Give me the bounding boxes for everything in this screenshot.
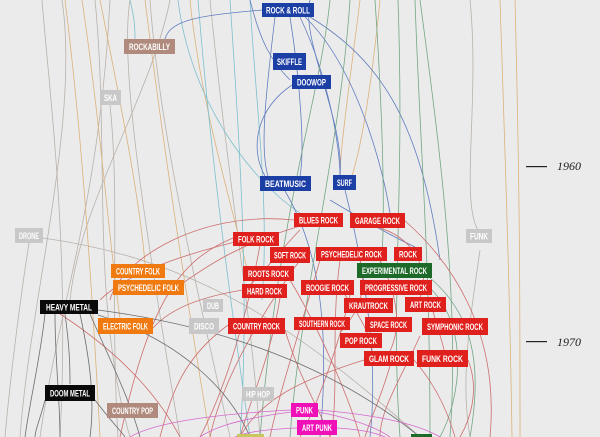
label: SPACE ROCK bbox=[365, 317, 412, 332]
label: SOUTHERN ROCK: SOUTHERN ROCK bbox=[299, 319, 345, 329]
label: SPACE ROCK: SPACE ROCK bbox=[370, 320, 407, 330]
label: HEAVY METAL bbox=[40, 300, 98, 314]
label: COUNTRY FOLK bbox=[111, 264, 165, 278]
timeline marker 1960 bbox=[526, 159, 581, 173]
label: PSYCHEDELIC FOLK: PSYCHEDELIC FOLK bbox=[118, 283, 179, 293]
timeline marker 1970 bbox=[526, 335, 581, 349]
label: COUNTRY ROCK bbox=[228, 318, 285, 334]
label: PROGRESSIVE ROCK bbox=[360, 280, 432, 295]
label: SKIFFLE: SKIFFLE bbox=[277, 57, 302, 67]
label: SURF: SURF bbox=[337, 178, 352, 188]
label: BLUES ROCK: BLUES ROCK bbox=[299, 216, 338, 226]
label: FOLK ROCK: FOLK ROCK bbox=[238, 234, 274, 244]
label: COUNTRY FOLK: COUNTRY FOLK bbox=[116, 266, 160, 276]
partial box bottom yellow bbox=[237, 434, 264, 437]
label: PSYCHEDELIC ROCK: PSYCHEDELIC ROCK bbox=[321, 250, 382, 260]
label: BEATMUSIC bbox=[260, 176, 311, 191]
label: ELECTRIC FOLK bbox=[98, 318, 153, 334]
label: KRAUTROCK bbox=[344, 298, 393, 313]
label: DUB bbox=[203, 299, 223, 312]
label: SYMPHONIC ROCK: SYMPHONIC ROCK bbox=[427, 322, 483, 332]
label: GLAM ROCK: GLAM ROCK bbox=[369, 354, 409, 364]
label: GLAM ROCK bbox=[364, 351, 414, 366]
label: FUNK bbox=[466, 229, 492, 243]
label: FOLK ROCK bbox=[233, 232, 279, 246]
label: ROOTS ROCK bbox=[243, 266, 294, 281]
label: PUNK bbox=[291, 403, 318, 417]
label: HIP HOP bbox=[242, 387, 274, 401]
label: HIP HOP: HIP HOP bbox=[246, 390, 270, 400]
label: BOOGIE ROCK bbox=[301, 280, 354, 295]
label: ART ROCK bbox=[405, 297, 446, 312]
label: FUNK ROCK: FUNK ROCK bbox=[422, 354, 463, 364]
timeline marker 1970: 1970 bbox=[557, 335, 581, 349]
label: SKA bbox=[100, 90, 121, 105]
label: DRONE bbox=[15, 228, 43, 243]
label: COUNTRY POP bbox=[107, 403, 158, 418]
label: PSYCHEDELIC FOLK bbox=[113, 280, 184, 295]
label: EXPERIMENTAL ROCK bbox=[357, 263, 432, 278]
label: DOOM METAL bbox=[45, 385, 95, 401]
label: POP ROCK bbox=[340, 333, 382, 348]
label: ELECTRIC FOLK: ELECTRIC FOLK bbox=[103, 322, 148, 332]
label: DUB: DUB bbox=[207, 301, 219, 311]
label: BEATMUSIC: BEATMUSIC bbox=[265, 179, 306, 189]
label: DOOM METAL: DOOM METAL bbox=[50, 388, 90, 398]
label: SOFT ROCK: SOFT ROCK bbox=[274, 250, 306, 260]
timeline marker 1960: 1960 bbox=[557, 159, 581, 173]
label: PUNK: PUNK bbox=[296, 406, 313, 416]
label: ROCK & ROLL bbox=[262, 3, 314, 17]
label: DRONE: DRONE bbox=[19, 231, 39, 241]
label: HEAVY METAL: HEAVY METAL bbox=[46, 302, 92, 312]
label: DISCO bbox=[189, 318, 219, 334]
label: COUNTRY POP: COUNTRY POP bbox=[112, 406, 153, 416]
label: BLUES ROCK bbox=[294, 213, 343, 227]
label: POP ROCK: POP ROCK bbox=[345, 336, 377, 346]
label: COUNTRY ROCK: COUNTRY ROCK bbox=[233, 322, 280, 332]
label: DISCO: DISCO bbox=[194, 322, 214, 332]
label: GARAGE ROCK: GARAGE ROCK bbox=[355, 216, 400, 226]
label: ROCK: ROCK bbox=[399, 250, 417, 260]
label: EXPERIMENTAL ROCK: EXPERIMENTAL ROCK bbox=[362, 266, 427, 276]
label: BOOGIE ROCK: BOOGIE ROCK bbox=[306, 283, 349, 293]
label: SKIFFLE bbox=[273, 53, 306, 70]
label: SOUTHERN ROCK bbox=[294, 317, 350, 330]
label: ART PUNK: ART PUNK bbox=[302, 423, 332, 433]
label: ROCKABILLY bbox=[124, 39, 175, 54]
label: ROOTS ROCK: ROOTS ROCK bbox=[248, 269, 289, 279]
label: SOFT ROCK bbox=[270, 247, 310, 263]
label: ART PUNK bbox=[297, 420, 337, 435]
label: HARD ROCK bbox=[242, 284, 287, 298]
label: ROCK bbox=[394, 247, 422, 261]
label: HARD ROCK: HARD ROCK bbox=[247, 286, 282, 296]
label: SKA: SKA bbox=[104, 93, 117, 103]
label: ART ROCK: ART ROCK bbox=[410, 300, 441, 310]
label: ROCKABILLY: ROCKABILLY bbox=[129, 42, 170, 52]
label: DOOWOP: DOOWOP bbox=[297, 78, 326, 88]
label: FUNK: FUNK bbox=[470, 232, 488, 242]
label: FUNK ROCK bbox=[417, 350, 468, 367]
label: DOOWOP bbox=[292, 75, 331, 89]
label: SURF bbox=[333, 175, 356, 190]
label: KRAUTROCK: KRAUTROCK bbox=[349, 301, 388, 311]
label: GARAGE ROCK bbox=[350, 213, 405, 228]
label: PROGRESSIVE ROCK: PROGRESSIVE ROCK bbox=[365, 283, 427, 293]
label: SYMPHONIC ROCK bbox=[422, 318, 488, 335]
label: PSYCHEDELIC ROCK bbox=[316, 247, 387, 261]
partial box bottom green bbox=[411, 434, 432, 437]
label: ROCK & ROLL: ROCK & ROLL bbox=[266, 6, 310, 16]
